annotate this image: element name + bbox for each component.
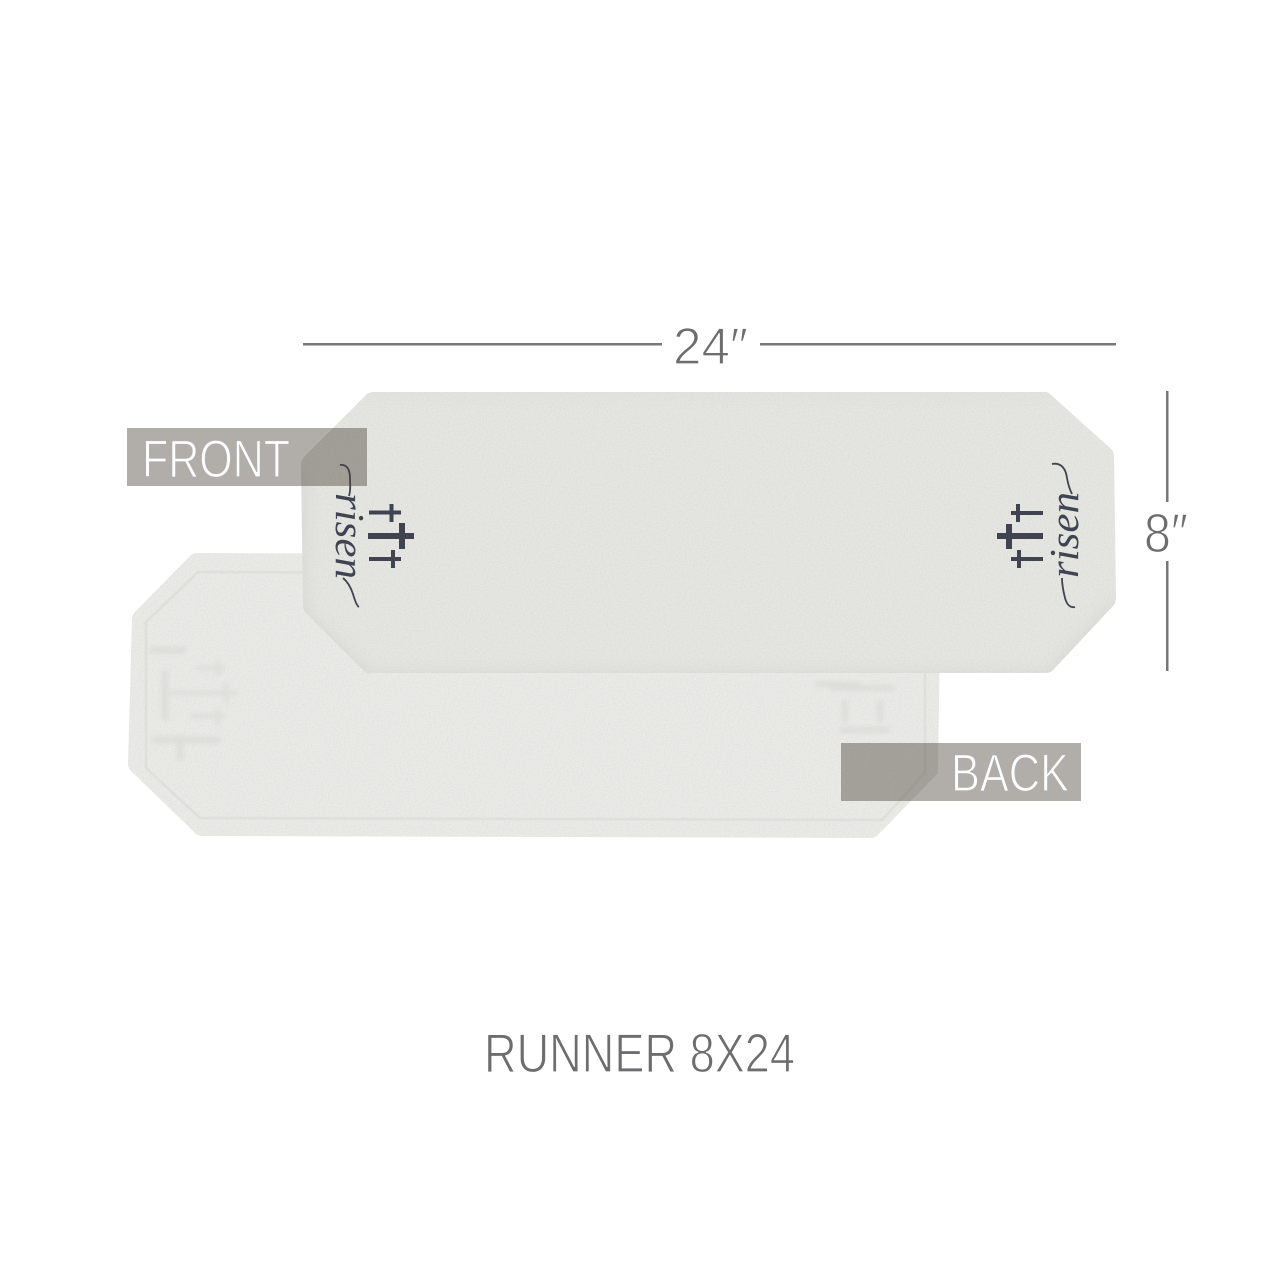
label: BACK: BACK bbox=[951, 744, 1069, 803]
crosses bbox=[368, 504, 414, 568]
ghost print: left bbox=[150, 650, 238, 760]
label: FRONT: FRONT bbox=[142, 430, 290, 489]
dimension: height 8 inches: 8″ bbox=[1144, 502, 1188, 564]
infographic canvas bbox=[127, 328, 1186, 1072]
panel: back of runner bbox=[128, 553, 941, 838]
hem stitching on back bbox=[144, 572, 925, 820]
ghost print: right bbox=[815, 684, 895, 730]
caption: RUNNER 8X24 bbox=[484, 1022, 795, 1084]
print: left crosses and risen bbox=[327, 465, 414, 607]
dimension: width 24 inches: 24″ bbox=[673, 318, 748, 376]
print: right crosses and risen bbox=[997, 464, 1087, 607]
label: BACK bbox=[841, 743, 1081, 803]
crosses bbox=[997, 504, 1043, 568]
swashes bbox=[1052, 464, 1075, 607]
swashes bbox=[340, 465, 359, 607]
panel: front of runner bbox=[300, 392, 1116, 678]
script word: risen bbox=[327, 493, 373, 579]
script word: risen bbox=[1041, 492, 1087, 578]
fabric shading bbox=[302, 486, 1105, 673]
